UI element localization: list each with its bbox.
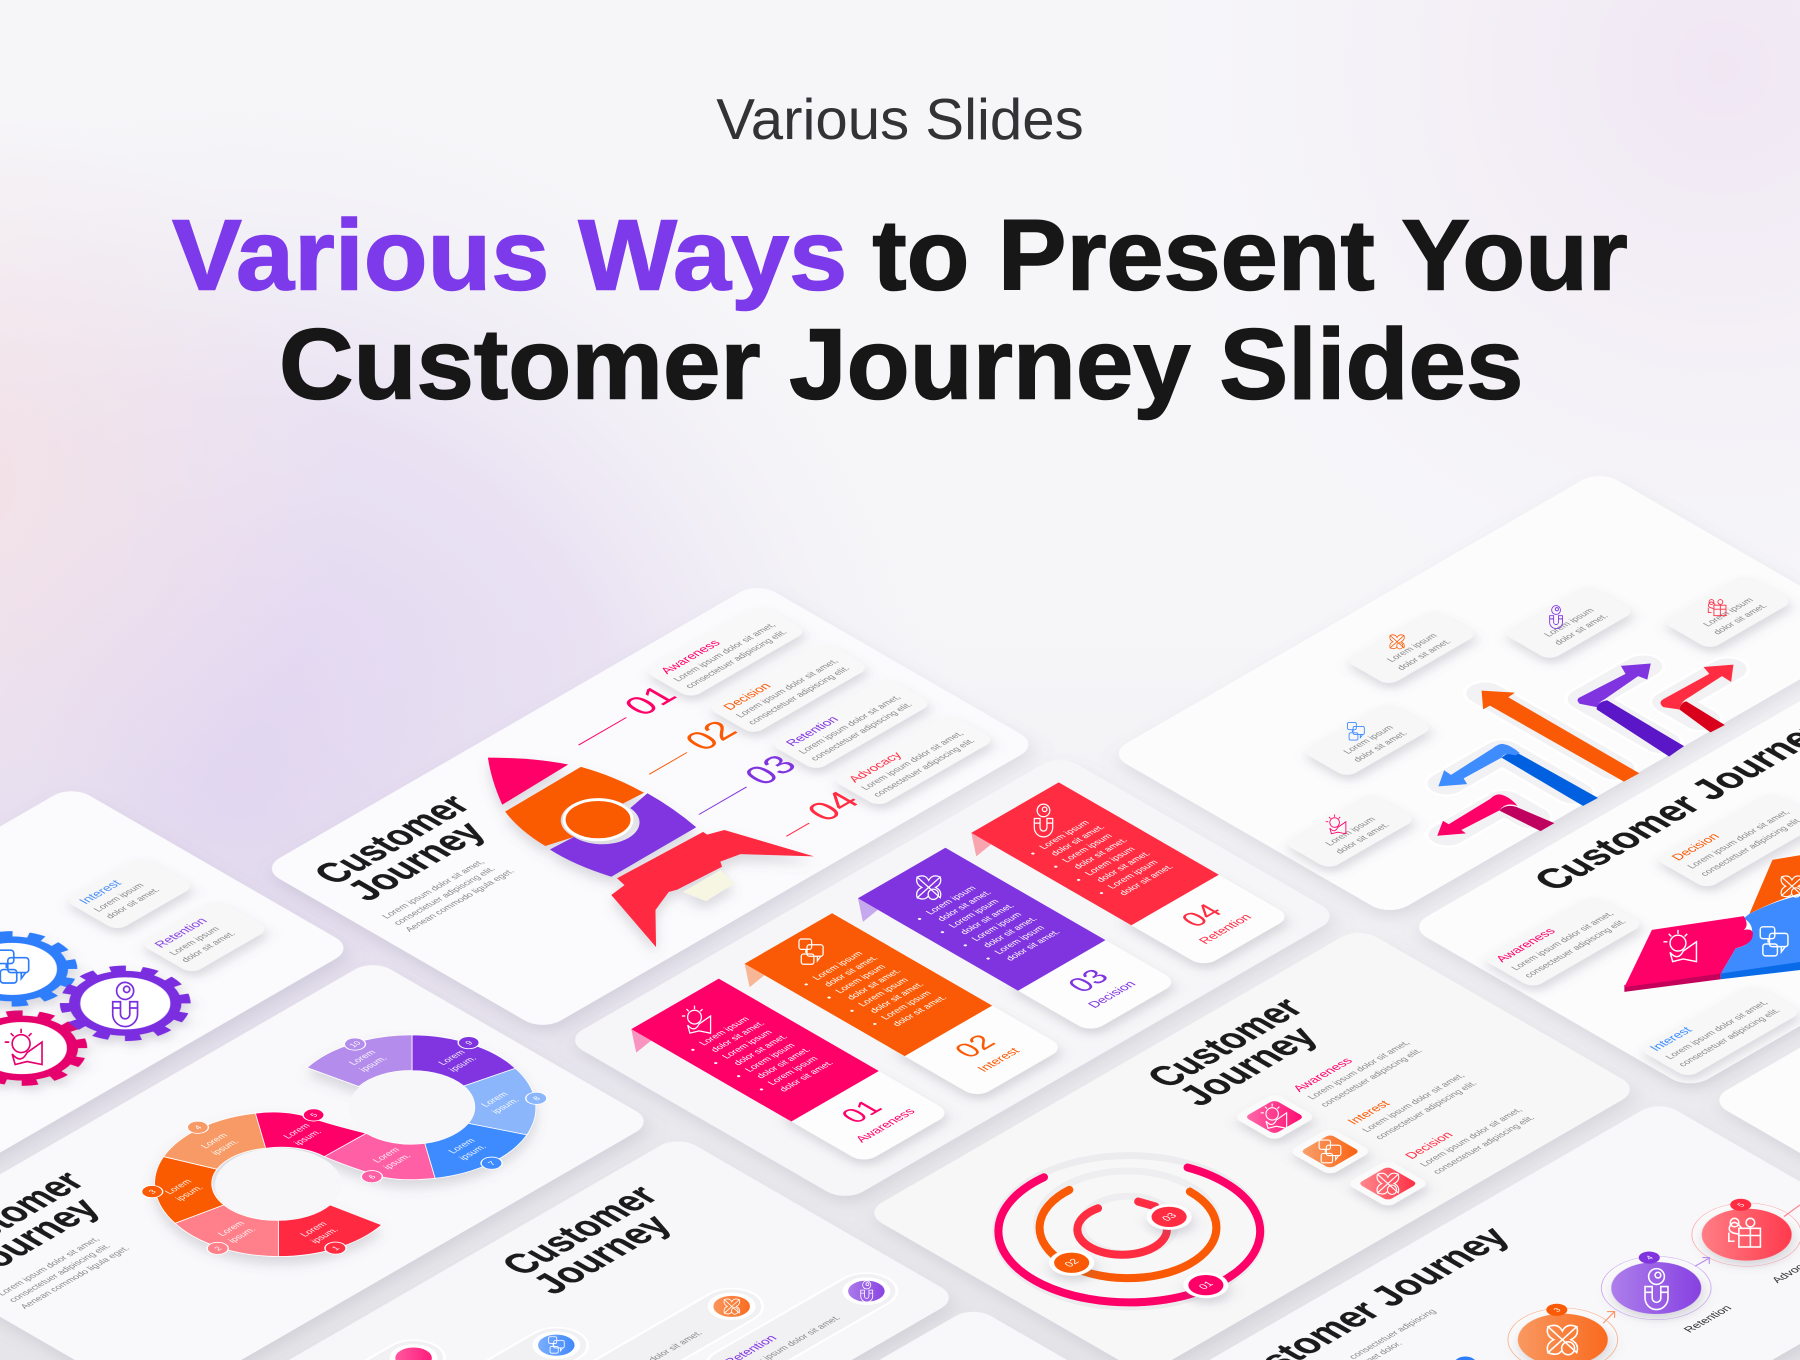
arrow: orange bbox=[1482, 691, 1639, 782]
column 02: Lorem ipsum bbox=[856, 976, 911, 1008]
segment labels: Lorem bbox=[479, 1090, 510, 1108]
card: decision bbox=[1654, 791, 1800, 889]
column 01: dolor sit amet. bbox=[777, 1059, 835, 1093]
column 01: dolor sit amet. bbox=[754, 1046, 813, 1080]
card: awareness bbox=[1481, 894, 1644, 988]
card: retention bbox=[139, 899, 269, 974]
circle step 5: 5 bbox=[1735, 1201, 1747, 1208]
column 04: dolor sit amet. bbox=[1048, 823, 1107, 857]
gear: purple bbox=[42, 955, 209, 1052]
column 04: dolor sit amet. bbox=[1094, 850, 1153, 884]
column 04: dolor sit amet. bbox=[1117, 863, 1175, 897]
column 01: Awareness bbox=[852, 1106, 918, 1144]
heading: Customer bbox=[1137, 991, 1313, 1093]
column 01: Lorem ipsum bbox=[743, 1042, 798, 1073]
text block: consectetuer adipiscing elit. bbox=[391, 865, 497, 927]
card: decision bbox=[707, 641, 870, 735]
column 02: Lorem ipsum bbox=[810, 950, 865, 981]
icon: flower bbox=[1781, 876, 1800, 897]
column 02: dolor sit amet. bbox=[890, 994, 949, 1028]
icon: flower bbox=[724, 1299, 740, 1314]
segment labels: Lorem bbox=[199, 1132, 230, 1150]
segment labels: Lorem bbox=[215, 1219, 247, 1238]
column 04: 04 bbox=[1174, 900, 1230, 932]
tile: pink bbox=[1233, 1093, 1316, 1141]
arrow: blue bbox=[1438, 744, 1598, 806]
segment labels bbox=[130, 1021, 560, 1269]
step 04 bbox=[766, 786, 868, 845]
pill: purple bbox=[694, 1266, 910, 1360]
card: magnet bbox=[1502, 584, 1635, 661]
card: retention: Lorem ipsum dolor sit amet, bbox=[796, 694, 903, 755]
segment labels: Lorem bbox=[436, 1048, 468, 1066]
text block: Aenean commodo ligula eget. bbox=[403, 867, 516, 933]
pill: pink bbox=[228, 1333, 457, 1360]
item: decision: Lorem ipsum dolor sit amet, bbox=[1418, 1106, 1524, 1168]
card: flower bbox=[1344, 608, 1478, 686]
title: Various Ways bbox=[172, 200, 847, 311]
segment labels: ipsum. bbox=[308, 1226, 340, 1245]
segment labels: Lorem bbox=[446, 1137, 478, 1155]
blue step badge bbox=[1450, 1354, 1480, 1360]
badge numbers: 8 bbox=[531, 1095, 543, 1102]
item: awareness: Awareness bbox=[1290, 1056, 1356, 1094]
icon: chat bbox=[0, 950, 29, 983]
segment labels: ipsum. bbox=[173, 1184, 205, 1202]
puzzle chart bbox=[1624, 855, 1800, 992]
column 02: dolor sit amet. bbox=[867, 981, 926, 1014]
segment labels: ipsum. bbox=[209, 1138, 241, 1156]
card: awareness: Lorem ipsum dolor sit amet, bbox=[671, 621, 778, 683]
card: magnet: dolor sit amet. bbox=[1552, 612, 1610, 646]
panel: right edge slide bbox=[1709, 817, 1800, 1263]
card: retention bbox=[769, 677, 932, 771]
badge numbers: 7 bbox=[486, 1160, 498, 1167]
card: decision: consectetuer adipiscing elit. bbox=[746, 665, 852, 726]
card: awareness: Awareness bbox=[658, 638, 723, 676]
column 04: Lorem ipsum bbox=[1037, 819, 1092, 850]
title bbox=[172, 200, 1628, 420]
icon: flower bbox=[1377, 1173, 1399, 1194]
segment labels: Lorem bbox=[163, 1177, 194, 1196]
column 03: dolor sit amet. bbox=[935, 889, 994, 923]
heading: Journey bbox=[1169, 1020, 1328, 1112]
item: decision: Decision bbox=[1402, 1130, 1456, 1161]
badge numbers: 4 bbox=[192, 1124, 204, 1131]
column 01: Lorem ipsum bbox=[697, 1015, 752, 1047]
column 04: Lorem ipsum bbox=[1060, 832, 1115, 864]
column 03: Lorem ipsum bbox=[992, 924, 1047, 956]
heading: Journey bbox=[337, 815, 495, 907]
step 03: 03 bbox=[735, 749, 806, 790]
column 03: Lorem ipsum bbox=[924, 884, 978, 916]
column 01: Lorem ipsum bbox=[766, 1055, 820, 1086]
card: gift bbox=[1661, 573, 1793, 650]
column 02: dolor sit amet. bbox=[845, 967, 903, 1001]
card: magnet: Lorem ipsum bbox=[1542, 606, 1597, 638]
icon: flower bbox=[917, 876, 941, 899]
column 03: dolor sit amet. bbox=[958, 902, 1016, 936]
badge numbers bbox=[97, 1003, 591, 1288]
step 01 bbox=[558, 680, 686, 754]
subtitle: Various Slides bbox=[716, 88, 1084, 152]
column 03 bbox=[840, 848, 1178, 1043]
column 02 bbox=[727, 913, 1065, 1108]
step 04: 04 bbox=[798, 786, 868, 827]
card: interest: Lorem ipsum bbox=[91, 881, 146, 913]
icon: chat bbox=[549, 1337, 564, 1353]
segment labels: ipsum. bbox=[447, 1055, 479, 1073]
card: advocacy bbox=[832, 713, 995, 807]
icon: gift bbox=[1729, 1218, 1760, 1247]
arrow channels bbox=[1344, 611, 1758, 850]
card: retention: dolor sit amet. bbox=[179, 930, 238, 964]
column 02: Lorem ipsum bbox=[833, 963, 888, 995]
item: decision: consectetuer adipiscing elit. bbox=[1431, 1114, 1537, 1175]
ring nodes: 03 bbox=[1160, 1212, 1180, 1223]
card: awareness: consectetuer adipiscing elit. bbox=[1522, 918, 1628, 979]
donut holes bbox=[215, 1070, 475, 1220]
item: interest: Interest bbox=[1344, 1098, 1393, 1127]
text block bbox=[380, 854, 516, 933]
icon: person bbox=[1663, 930, 1696, 962]
heading: Customer bbox=[304, 788, 480, 890]
tile: orange bbox=[1288, 1127, 1372, 1176]
arrow: red bbox=[1661, 665, 1733, 732]
column 03: Lorem ipsum bbox=[946, 897, 1001, 929]
heading: Journey bbox=[523, 1208, 681, 1300]
icon: magnet bbox=[1034, 804, 1053, 837]
card: advocacy: Lorem ipsum dolor sit amet, bbox=[859, 730, 966, 791]
title: to Present Your bbox=[872, 200, 1628, 311]
connector arrows bbox=[1603, 1205, 1800, 1323]
card: gift: dolor sit amet. bbox=[1711, 602, 1769, 636]
panel: infinity slide bbox=[0, 959, 654, 1360]
column 01: Lorem ipsum bbox=[720, 1028, 775, 1060]
column 02: Lorem ipsum bbox=[879, 989, 934, 1021]
card: flower: Lorem ipsum bbox=[1385, 632, 1440, 663]
column 01: 01 bbox=[834, 1096, 890, 1128]
card: flower: dolor sit amet. bbox=[1395, 638, 1453, 671]
infinity chart bbox=[155, 1035, 536, 1257]
item: interest bbox=[1344, 1063, 1480, 1141]
badge numbers: 9 bbox=[463, 1039, 475, 1046]
gear: pink bbox=[0, 1000, 105, 1096]
rocket bbox=[488, 758, 814, 947]
item: interest: Lorem ipsum dolor sit amet, bbox=[1360, 1072, 1467, 1133]
icon: chat bbox=[799, 939, 823, 964]
item: awareness bbox=[1290, 1030, 1425, 1108]
circle step 4: 4 bbox=[1644, 1254, 1656, 1261]
card: chat: Lorem ipsum bbox=[1341, 724, 1396, 755]
ring nodes bbox=[1040, 1193, 1278, 1331]
panel: circles journey slide bbox=[1164, 1100, 1800, 1360]
gear: blue bbox=[0, 921, 95, 1017]
badge numbers: 3 bbox=[147, 1188, 159, 1195]
card: interest: Interest bbox=[1647, 1025, 1696, 1053]
column 02: 02 bbox=[948, 1030, 1003, 1062]
item: awareness: consectetuer adipiscing elit. bbox=[1318, 1047, 1425, 1108]
card: person bbox=[1283, 793, 1417, 870]
ring nodes: 02 bbox=[1063, 1257, 1082, 1269]
segment labels: ipsum. bbox=[292, 1128, 324, 1147]
step 01: 01 bbox=[615, 680, 686, 721]
item: awareness: Lorem ipsum dolor sit amet, bbox=[1305, 1039, 1412, 1101]
badge numbers: 1 bbox=[330, 1245, 342, 1252]
card: interest: Interest bbox=[76, 878, 125, 906]
text block: Lorem ipsum dolor sit amet, bbox=[380, 858, 486, 920]
segment labels: Lorem bbox=[281, 1122, 313, 1140]
card: decision: Lorem ipsum dolor sit amet, bbox=[734, 657, 840, 719]
column 04: dolor sit amet. bbox=[1071, 836, 1130, 870]
card: decision: Lorem ipsum dolor sit amet, bbox=[1685, 808, 1792, 870]
segment labels: ipsum. bbox=[457, 1143, 489, 1161]
pill: blue bbox=[358, 1320, 600, 1360]
concentric rings chart bbox=[996, 1156, 1262, 1307]
panel: gears slide bbox=[0, 785, 354, 1235]
panel: colored columns slide bbox=[565, 754, 1340, 1202]
circle step 4 bbox=[1579, 1243, 1734, 1333]
card: awareness: Awareness bbox=[1493, 926, 1559, 964]
segment labels: ipsum. bbox=[226, 1226, 258, 1244]
icon: flower bbox=[1547, 1325, 1577, 1355]
icon: person bbox=[682, 1006, 711, 1033]
badge numbers: 10 bbox=[347, 1040, 363, 1049]
panel: lower blank slide bbox=[477, 1306, 1255, 1360]
step 02 bbox=[629, 715, 746, 783]
item: interest: consectetuer adipiscing elit. bbox=[1373, 1080, 1479, 1141]
card: chat bbox=[1301, 701, 1434, 778]
step 02: 02 bbox=[675, 715, 746, 756]
panel: puzzle slide bbox=[1409, 643, 1800, 1089]
arrow: purple bbox=[1578, 664, 1684, 757]
column 03: dolor sit amet. bbox=[981, 915, 1039, 949]
column 04: Retention bbox=[1196, 912, 1255, 946]
column 01 bbox=[613, 979, 951, 1174]
text block: Aenean commodo ligula eget. bbox=[18, 1245, 132, 1310]
icon: person bbox=[1261, 1104, 1287, 1128]
card: retention: Retention bbox=[152, 916, 210, 950]
card: decision: Decision bbox=[1669, 831, 1723, 862]
card: interest: dolor sit amet. bbox=[103, 886, 162, 920]
icon: person bbox=[1326, 814, 1346, 834]
segment labels: Lorem bbox=[298, 1220, 329, 1238]
segment labels: ipsum. bbox=[489, 1096, 521, 1115]
card: retention: Lorem ipsum bbox=[167, 925, 222, 957]
item: decision bbox=[1402, 1097, 1537, 1175]
segment labels: Lorem bbox=[347, 1048, 378, 1066]
column 03: 03 bbox=[1061, 965, 1116, 997]
icon: flower bbox=[1390, 635, 1404, 649]
card: person: Lorem ipsum bbox=[1323, 815, 1378, 847]
circle step 3: 3 bbox=[1551, 1306, 1563, 1313]
card: interest: consectetuer adipiscing elit. bbox=[1676, 1007, 1782, 1068]
card: interest bbox=[1638, 983, 1800, 1078]
card: retention: Retention bbox=[783, 714, 842, 748]
panel: rocket slide bbox=[261, 582, 1039, 1031]
column 02: dolor sit amet. bbox=[822, 954, 880, 988]
heading: Customer bbox=[492, 1179, 668, 1281]
panel: pills slide bbox=[182, 1135, 959, 1360]
icon: chat bbox=[1347, 722, 1364, 740]
column 02: Interest bbox=[974, 1046, 1023, 1074]
column 03: dolor sit amet. bbox=[1004, 928, 1062, 962]
number badges bbox=[88, 998, 599, 1293]
card: gift: Lorem ipsum bbox=[1701, 596, 1756, 628]
column 01: dolor sit amet. bbox=[731, 1033, 790, 1067]
icon: person bbox=[5, 1029, 42, 1065]
icon: gift bbox=[1708, 600, 1726, 616]
text block: consectetuer adipiscing elit. bbox=[6, 1242, 113, 1304]
card: interest: Lorem ipsum dolor sit amet, bbox=[1663, 999, 1770, 1061]
panel: arrows slide bbox=[1108, 470, 1800, 916]
column 04 bbox=[953, 782, 1291, 977]
text block: consectetuer adipiscing bbox=[1347, 1308, 1438, 1360]
pill: orange bbox=[531, 1281, 775, 1360]
badge numbers: 5 bbox=[308, 1112, 320, 1119]
card: interest bbox=[64, 855, 195, 931]
ring nodes: 01 bbox=[1197, 1280, 1217, 1291]
segment labels: ipsum. bbox=[357, 1055, 389, 1073]
label: retention: Retention bbox=[1682, 1304, 1735, 1335]
card: chat: dolor sit amet. bbox=[1351, 729, 1410, 763]
title: Customer Journey Slides bbox=[279, 309, 1523, 420]
card: retention: consectetuer adipiscing elit. bbox=[808, 701, 915, 762]
circle step 3 bbox=[1485, 1295, 1640, 1360]
badge numbers: 2 bbox=[212, 1245, 224, 1252]
segment labels: ipsum. bbox=[381, 1152, 413, 1171]
card: awareness: Lorem ipsum dolor sit amet, bbox=[1509, 910, 1616, 972]
circle step 5 bbox=[1669, 1190, 1800, 1279]
icon: magnet bbox=[113, 982, 138, 1027]
icon: chat bbox=[1319, 1140, 1341, 1163]
card: awareness bbox=[644, 604, 807, 699]
icon: magnet bbox=[1645, 1269, 1668, 1310]
column 03: Lorem ipsum bbox=[969, 911, 1024, 942]
arrow: pink bbox=[1437, 794, 1554, 836]
icon: magnet bbox=[1550, 606, 1562, 629]
card: decision: Decision bbox=[720, 681, 774, 712]
segment labels: Lorem bbox=[371, 1146, 402, 1164]
icon: magnet bbox=[861, 1281, 873, 1302]
badge numbers: 6 bbox=[366, 1173, 378, 1180]
panel: rings slide bbox=[864, 927, 1640, 1360]
card: awareness: consectetuer adipiscing elit. bbox=[683, 628, 789, 690]
step 03 bbox=[678, 749, 806, 823]
card: advocacy: Advocacy bbox=[845, 750, 905, 784]
column 04: Lorem ipsum bbox=[1083, 845, 1138, 877]
icon: chat bbox=[1760, 927, 1788, 956]
card: advocacy: consectetuer adipiscing elit. bbox=[871, 737, 977, 798]
column 04: Lorem ipsum bbox=[1106, 858, 1160, 890]
card: person: dolor sit amet. bbox=[1333, 821, 1392, 855]
column 01: dolor sit amet. bbox=[708, 1020, 767, 1053]
column 03: Decision bbox=[1085, 979, 1139, 1010]
tile: red bbox=[1346, 1159, 1430, 1208]
